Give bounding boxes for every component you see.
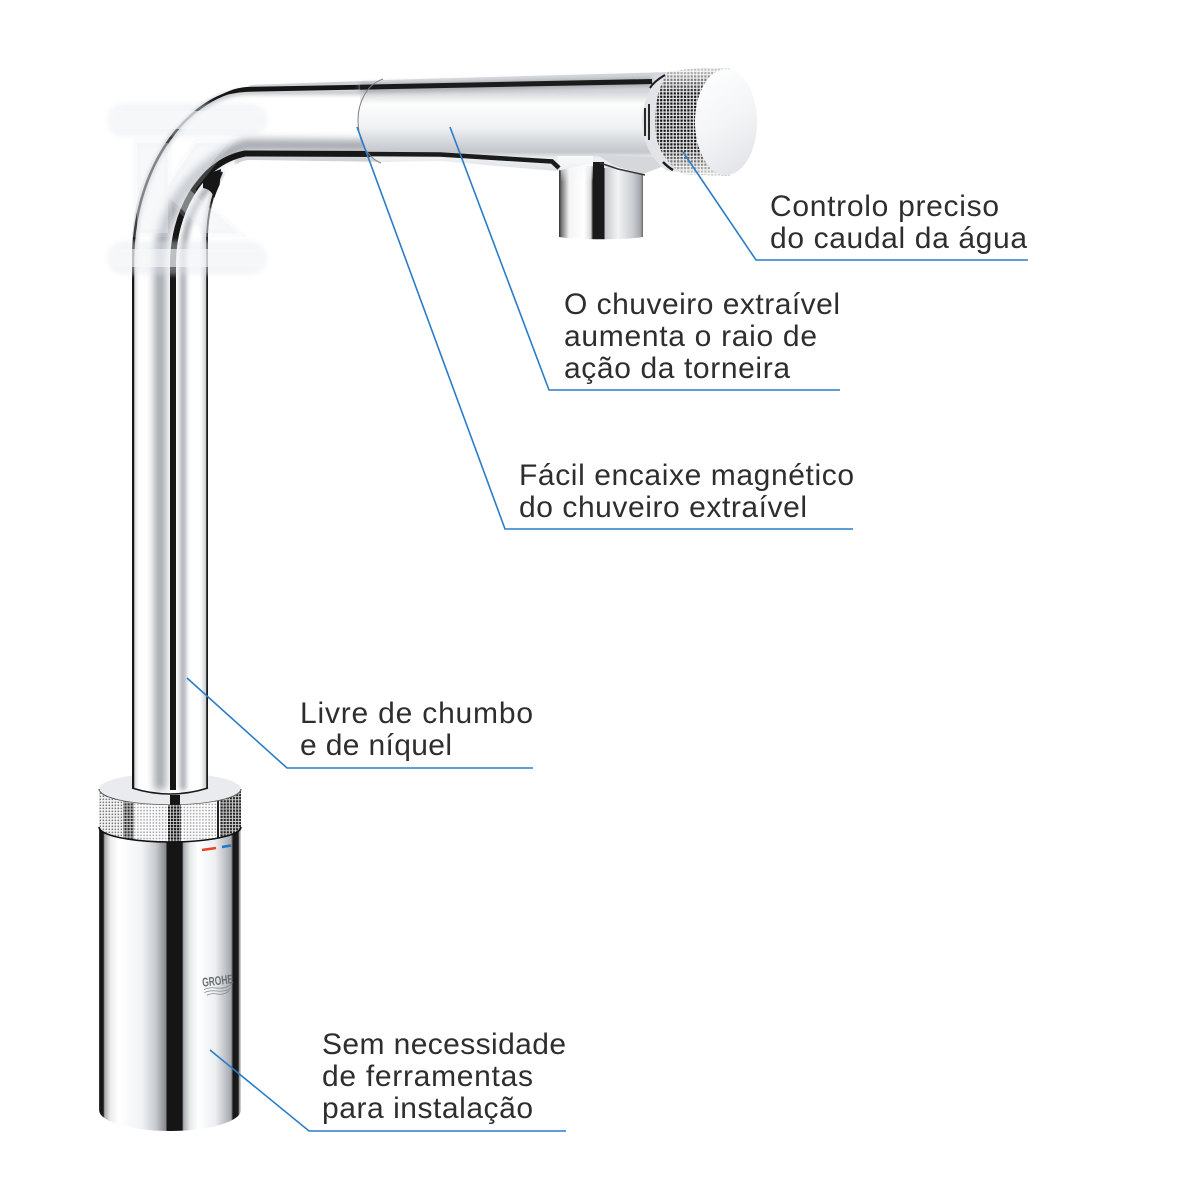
faucet illustration — [99, 68, 757, 1131]
callout: no tools: de ferramentas — [322, 1060, 533, 1093]
callout: pull-out spray: aumenta o raio de — [564, 320, 817, 353]
callout: lead and nickel free: Livre de chumbo — [300, 697, 533, 730]
GROHE logo: GROHE — [201, 972, 234, 990]
leader line: lead and nickel free — [187, 678, 533, 768]
faucet tube and bend — [132, 80, 390, 805]
watermark logo — [112, 111, 262, 267]
knurled ring — [99, 790, 241, 842]
base body — [99, 773, 241, 1131]
leader line: magnetic docking — [357, 127, 853, 529]
leader line: flow control — [683, 152, 1028, 260]
callout: magnetic docking: do chuveiro extraível — [519, 491, 807, 524]
pull-out spray head — [358, 72, 672, 184]
callout: flow control: do caudal da água — [770, 222, 1027, 255]
collar — [642, 72, 680, 172]
dark reflections — [132, 92, 230, 788]
base top plate — [99, 773, 241, 805]
knurled control knob — [642, 68, 757, 176]
leader line: no tools — [210, 1050, 566, 1131]
callout: magnetic docking: Fácil encaixe magnético — [519, 459, 854, 492]
spout outlet — [559, 166, 643, 239]
callout: pull-out spray: O chuveiro extraível — [564, 288, 840, 321]
callout: no tools: Sem necessidade — [322, 1028, 566, 1061]
callout: lead and nickel free: e de níquel — [300, 729, 452, 762]
hot and cold marks — [202, 848, 216, 850]
GROHE logo — [201, 972, 235, 996]
callout: no tools: para instalação — [322, 1092, 533, 1125]
soft shading — [160, 145, 390, 790]
leader line: pull-out spray — [450, 127, 840, 390]
callout: flow control: Controlo preciso — [770, 190, 999, 223]
tube foot — [132, 788, 208, 794]
callout: pull-out spray: ação da torneira — [564, 352, 790, 385]
